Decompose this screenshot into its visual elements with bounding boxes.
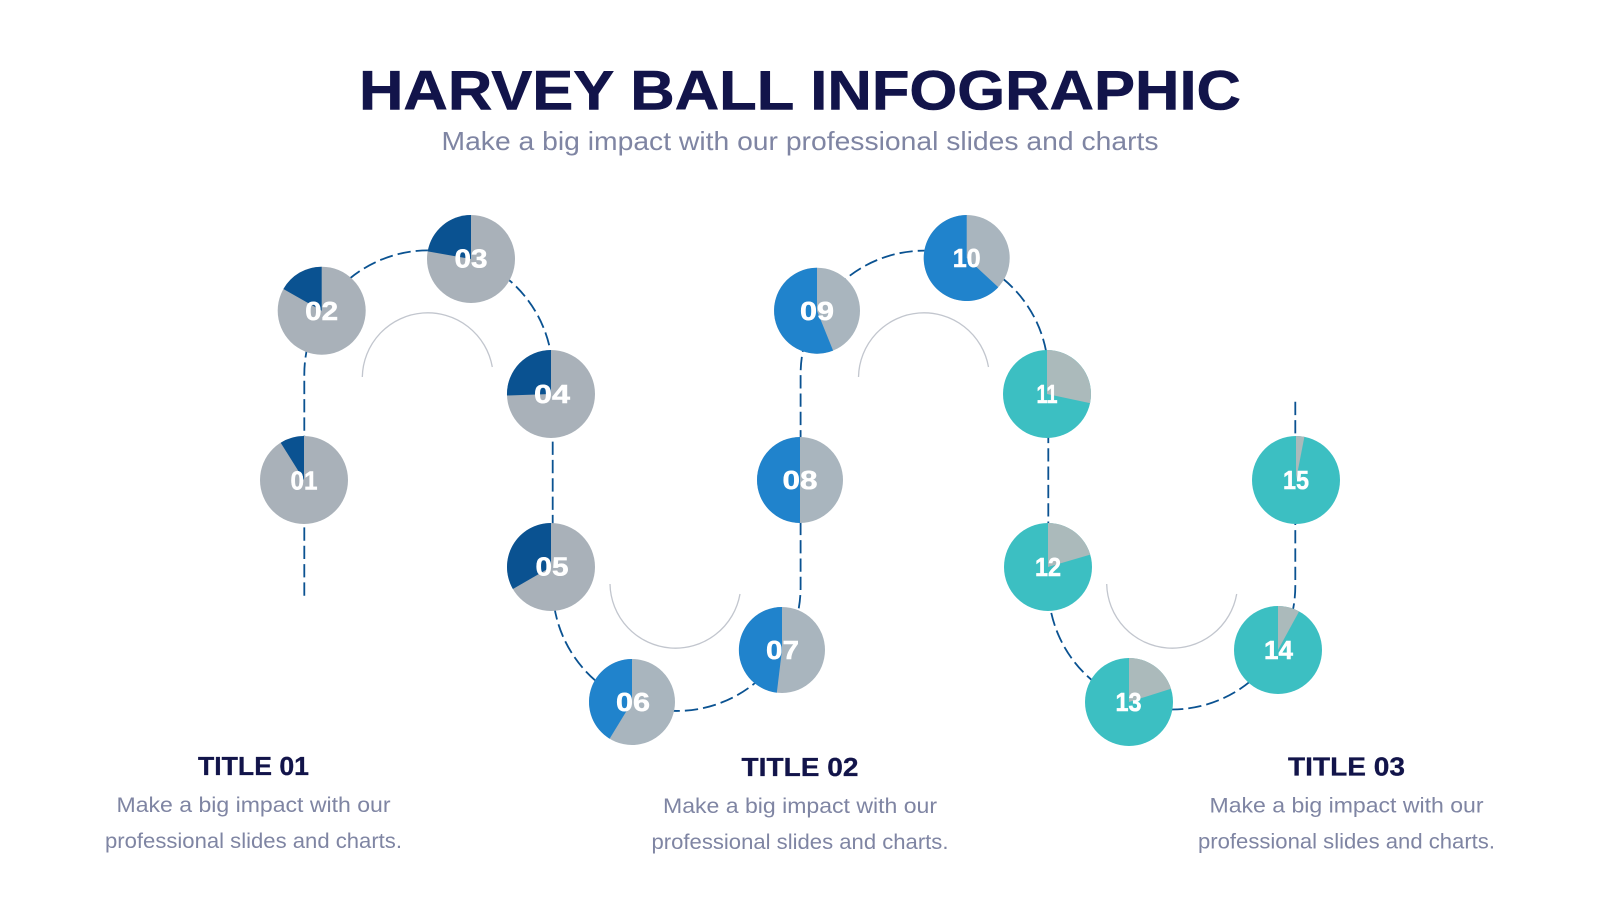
subtitle: Make a big impact with our professional slides and charts	[442, 126, 1158, 156]
ball 05	[507, 523, 595, 611]
text block: title 01: TITLE 01	[198, 751, 309, 781]
ball 11	[1003, 350, 1091, 438]
ball 12	[1004, 523, 1092, 611]
ball 15	[1252, 436, 1340, 524]
ball 07: 07	[766, 635, 799, 665]
text block: title 03: professional slides and charts.	[1198, 830, 1495, 854]
inner arcs	[362, 313, 1237, 648]
dashed path	[304, 250, 1295, 711]
ball 05: 05	[536, 552, 568, 582]
ball 04: 04	[534, 379, 571, 409]
text block: title 03	[1198, 752, 1495, 854]
ball 13: 13	[1116, 687, 1142, 717]
text block: title 01	[105, 751, 402, 853]
ball 08	[757, 437, 843, 523]
ball 07	[739, 607, 825, 693]
text block: title 02	[652, 752, 948, 854]
title: HARVEY BALL INFOGRAPHIC	[359, 58, 1241, 122]
ball 12: 12	[1035, 552, 1061, 582]
ball 11: 11	[1036, 379, 1058, 409]
text block: title 02: TITLE 02	[742, 752, 858, 782]
ball 02: 02	[305, 296, 338, 326]
ball 15: 15	[1283, 465, 1309, 495]
ball 14: 14	[1264, 635, 1294, 665]
ball 04	[507, 350, 595, 438]
ball 06	[589, 659, 675, 745]
ball 10	[924, 215, 1010, 301]
text block: title 02: professional slides and charts.	[652, 831, 948, 854]
ball 01	[260, 436, 348, 524]
text block: title 02: Make a big impact with our	[663, 795, 937, 818]
ball 10: 10	[953, 243, 981, 273]
ball 03: 03	[454, 244, 488, 274]
text block: title 01: professional slides and charts.	[105, 830, 402, 853]
text block: title 03: TITLE 03	[1288, 752, 1405, 782]
ball 09: 09	[800, 296, 834, 326]
ball 06: 06	[616, 687, 650, 717]
text block: title 01: Make a big impact with our	[116, 794, 391, 817]
ball 13	[1085, 658, 1173, 746]
ball 03	[427, 215, 515, 303]
ball 01: 01	[290, 466, 318, 496]
ball 09	[774, 268, 860, 354]
text block: title 03: Make a big impact with our	[1210, 794, 1484, 818]
ball 14	[1234, 606, 1322, 694]
ball 02	[278, 267, 366, 355]
ball 08: 08	[782, 465, 818, 495]
